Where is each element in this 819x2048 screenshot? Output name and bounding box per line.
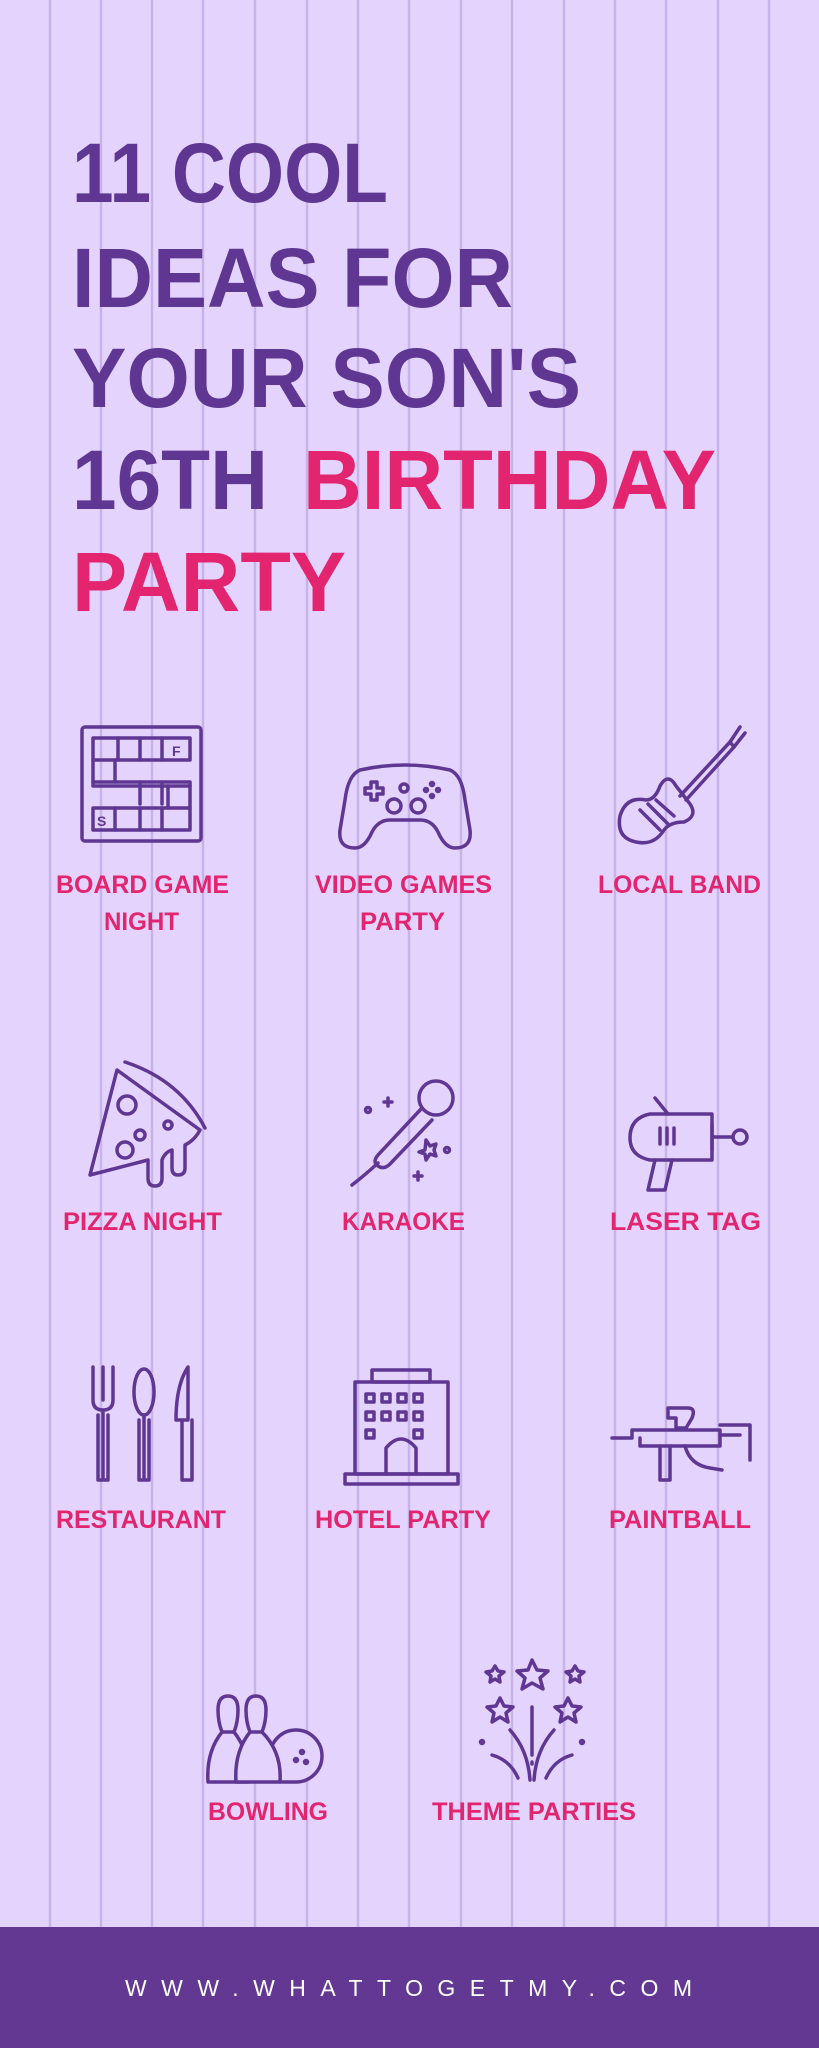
title: 16TH	[72, 433, 268, 527]
icon: board game: F	[172, 743, 181, 759]
labels: PAINTBALL	[609, 1506, 751, 1534]
icon: laser tag	[630, 1098, 747, 1190]
labels: KARAOKE	[342, 1208, 465, 1236]
icon: hotel	[345, 1370, 458, 1484]
title: IDEAS FOR	[72, 231, 513, 325]
labels	[56, 871, 761, 1826]
labels: LOCAL BAND	[598, 871, 761, 899]
labels: VIDEO GAMES	[315, 871, 492, 899]
icon: board game	[82, 727, 201, 841]
footer	[0, 1927, 819, 2048]
icon: paintball gun	[612, 1408, 750, 1480]
icon: cutlery	[93, 1367, 192, 1480]
title: YOUR SON'S	[72, 331, 581, 425]
labels: PIZZA NIGHT	[63, 1208, 222, 1236]
icon: guitar	[619, 727, 745, 843]
labels: BOWLING	[208, 1798, 328, 1826]
title: BIRTHDAY	[303, 433, 716, 527]
title	[72, 126, 716, 629]
title: 11 COOL	[72, 126, 388, 220]
labels: BOARD GAME	[56, 871, 229, 899]
icon: board game: S	[97, 813, 106, 829]
labels: THEME PARTIES	[432, 1798, 636, 1826]
footer: WWW.WHATTOGETMY.COM	[125, 1975, 692, 2001]
labels: LASER TAG	[610, 1208, 761, 1236]
labels: HOTEL PARTY	[315, 1506, 491, 1534]
icon: bowling	[208, 1696, 322, 1782]
labels: PARTY	[360, 908, 445, 936]
labels: NIGHT	[104, 908, 179, 936]
icon: game controller	[340, 765, 470, 848]
icon: pizza	[90, 1062, 205, 1186]
title: PARTY	[72, 535, 346, 629]
icon: fireworks	[480, 1660, 584, 1780]
labels: RESTAURANT	[56, 1506, 226, 1534]
icon: karaoke mic	[352, 1081, 453, 1185]
